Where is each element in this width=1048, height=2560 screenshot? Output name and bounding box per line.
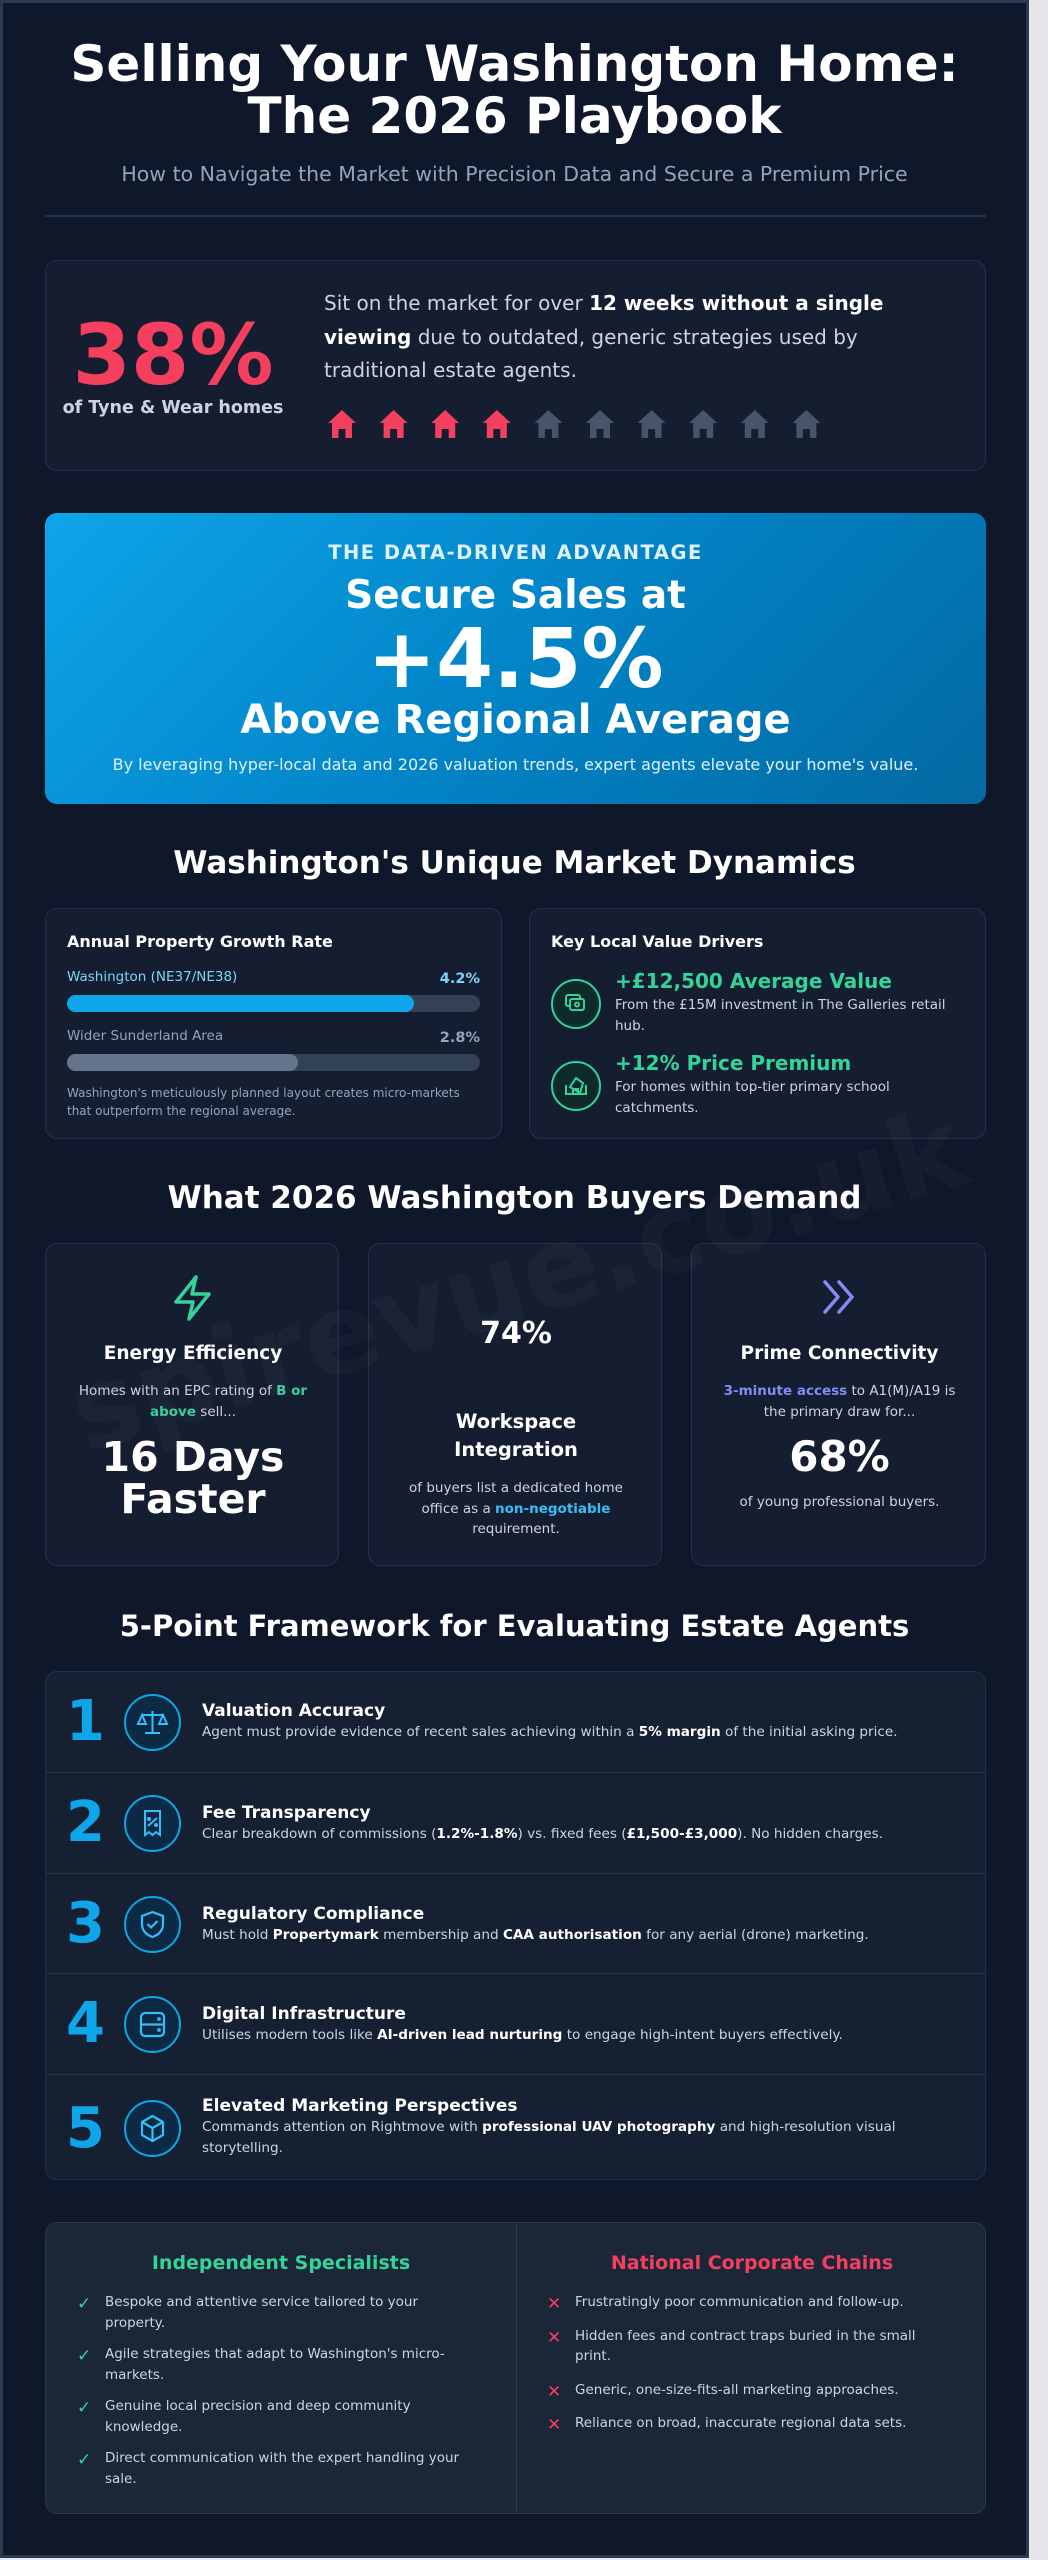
column: national chains: Reliance on broad, inaccurate regional data sets. [575,2415,906,2431]
icon: receipt [124,1795,181,1852]
bar: Sunderland [67,1028,480,1071]
panel: prime connectivity: Prime Connectivity [741,1343,938,1364]
chart title: Annual Property Growth Rate [67,932,333,951]
icon: scales [124,1694,181,1751]
panel: prime connectivity: of young professional buyers. [740,1494,939,1510]
icon: school house [551,1061,601,1111]
column: national chains: National Corporate Chains [611,2252,893,2274]
panel: energy efficiency: Energy Efficiency [104,1343,282,1364]
row 2 [46,1772,987,1873]
column: national chains: ✕ [547,2415,561,2435]
title: Selling Your Washington Home: [70,35,959,93]
heading: framework: 5-Point Framework for Evaluating Estate Agents [120,1609,909,1643]
title [70,35,959,145]
banner label: THE DATA-DRIVEN ADVANTAGE [328,541,703,564]
icon: server [124,1996,181,2053]
column: national chains: Hidden fees and contract traps buried in the small print. [575,2328,916,2364]
row 4: Utilises modern tools like AI-driven lead nurturing to engage high-intent buyers effectively. [202,2027,843,2043]
heading: buyers demand: What 2026 Washington Buyers Demand [168,1180,861,1216]
panel: data-driven advantage banner [45,513,986,804]
bar: Sunderland: Wider Sunderland Area [67,1028,223,1044]
panel: workspace integration: 74% [480,1316,552,1351]
panel: stat 38% [45,260,986,471]
row 3: 3 [66,1891,105,1956]
chart footnote: Washington's meticulously planned layout creates micro-markets that outperform the regional average. [67,1086,460,1118]
panel: prime connectivity [691,1243,986,1566]
row 1: Agent must provide evidence of recent sales achieving within a 5% margin of the initial asking price. [202,1724,898,1740]
panel: workspace integration: Integration [454,1438,578,1461]
panel: comparison [45,2222,986,2514]
column: national chains: Generic, one-size-fits-all marketing approaches. [575,2382,899,2398]
row 2: Fee Transparency [202,1803,371,1823]
column: national chains: ✕ [547,2328,561,2348]
row 4 [46,1973,987,2074]
panel: value drivers: Key Local Value Drivers [551,932,763,951]
column: independent specialists: ✓ [77,2294,91,2314]
driver 1: +£12,500 Average Value [615,969,892,993]
subtitle: How to Navigate the Market with Precision Data and Secure a Premium Price [121,162,908,186]
panel: energy efficiency: 16 Days [102,1433,284,1481]
column: independent specialists: Agile strategies that adapt to Washington's micro-markets. [105,2346,445,2382]
driver 2: For homes within top-tier primary school catchments. [615,1079,890,1116]
driver 1 [551,969,946,1034]
row 4: Digital Infrastructure [202,2004,406,2024]
column: independent specialists: ✓ [77,2450,91,2470]
banner headline: Secure Sales at [345,573,686,618]
bar: Washington: Washington (NE37/NE38) [67,969,237,985]
panel: prime connectivity: 3-minute access to A1(M)/A19 is the primary draw for... [724,1383,955,1420]
row 4: 4 [66,1991,105,2056]
stat label: of Tyne & Wear homes [63,398,283,418]
column: national chains: ✕ [547,2294,561,2314]
banner headline [240,573,791,743]
row 1 [66,1689,898,1754]
bar: Sunderland: 2.8% [440,1030,480,1046]
icon row: houses [328,410,820,438]
row 5: Commands attention on Rightmove with professional UAV photography and high-resolution visual storytelling. [202,2119,896,2156]
stat description: Sit on the market for over 12 weeks without a single viewing due to outdated, generic strategies used by traditional estate agents. [324,291,883,382]
panel: growth rate chart [45,908,502,1139]
heading: market dynamics: Washington's Unique Market Dynamics [173,845,856,881]
panel: energy efficiency: Homes with an EPC rating of B or above sell... [79,1383,307,1420]
icon: shield [124,1896,181,1953]
bar: Washington: 4.2% [440,971,480,987]
banner headline: Above Regional Average [240,697,791,743]
panel: energy efficiency [45,1243,339,1566]
column: independent specialists: ✓ [77,2398,91,2418]
column: independent specialists [77,2252,460,2486]
banner caption: By leveraging hyper-local data and 2026 valuation trends, expert agents elevate your home's value. [113,755,918,774]
row 2: Clear breakdown of commissions (1.2%-1.8%) vs. fixed fees (£1,500-£3,000). No hidden charges. [202,1826,883,1842]
column: national chains: Frustratingly poor communication and follow-up. [575,2294,904,2310]
panel: workspace integration: of buyers list a dedicated home office as a non-negotiable requirement. [409,1480,623,1537]
bar: Washington [67,969,480,1012]
panel: prime connectivity: 68% [789,1432,890,1481]
row 5 [46,2074,987,2181]
column: national chains: ✕ [547,2382,561,2402]
panel: value drivers [529,908,986,1139]
panel: workspace integration: Workspace [456,1410,576,1433]
row 1: 1 [66,1689,105,1754]
row 2: 2 [66,1790,105,1855]
watermark: spirevue.co.uk [55,1083,981,1479]
icon: cube [124,2100,181,2157]
column: independent specialists: Direct communication with the expert handling your sale. [105,2450,459,2486]
row 1: Valuation Accuracy [202,1701,385,1721]
row 5: Elevated Marketing Perspectives [202,2096,518,2116]
icon: bolt [174,1275,211,1321]
panel: 5-point framework [45,1671,986,2180]
row 5: 5 [66,2096,105,2161]
icon: cash [551,979,601,1029]
column: independent specialists: ✓ [77,2346,91,2366]
title: The 2026 Playbook [248,87,781,145]
row 3: Regulatory Compliance [202,1904,424,1924]
big stat: 38% [72,306,274,404]
row 3 [46,1873,987,1973]
panel: workspace integration [368,1243,662,1566]
driver 1: From the £15M investment in The Galleries retail hub. [615,997,946,1034]
driver 2 [551,1051,890,1116]
column: independent specialists: Bespoke and attentive service tailored to your property. [105,2294,418,2330]
panel: energy efficiency: Faster [120,1475,266,1523]
column: national chains [547,2252,916,2435]
banner headline: +4.5% [367,612,664,707]
driver 2: +12% Price Premium [615,1051,851,1075]
column: independent specialists: Genuine local precision and deep community knowledge. [105,2398,411,2434]
icon: chevrons [823,1280,854,1314]
column: independent specialists: Independent Specialists [152,2252,410,2274]
row 3: Must hold Propertymark membership and CAA authorisation for any aerial (drone) marketing. [202,1927,869,1943]
